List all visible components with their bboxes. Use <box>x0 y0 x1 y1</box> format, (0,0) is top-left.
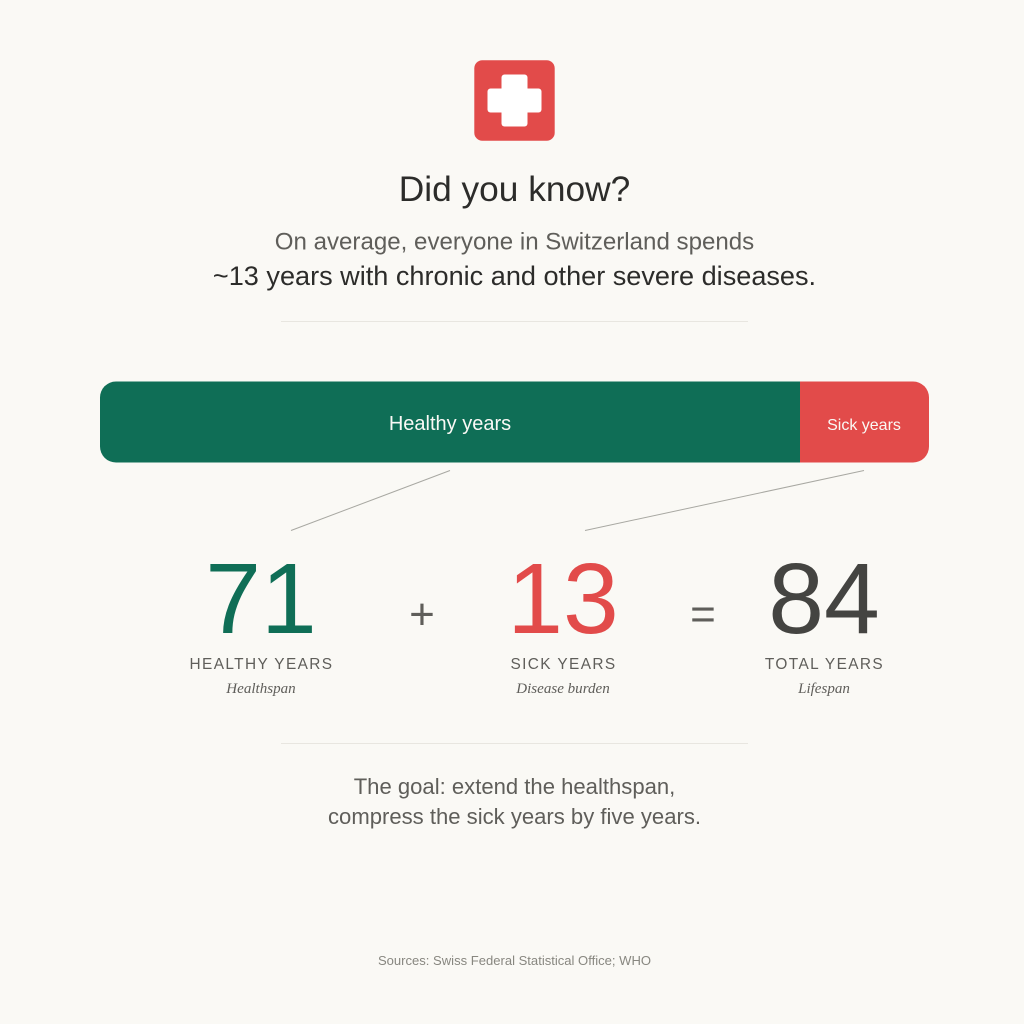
bar segment: sick years <box>800 382 929 462</box>
title: Did you know? <box>399 170 630 209</box>
stat: total years: 84 <box>768 543 880 655</box>
label: sick years: Sick years <box>827 417 901 434</box>
stat: total years: Lifespan <box>797 681 850 697</box>
sources: Sources: Swiss Federal Statistical Office; WHO <box>378 953 651 968</box>
stat: healthy years <box>190 543 333 697</box>
intro text: On average, everyone in Switzerland spends <box>275 228 754 256</box>
operator: equals: = <box>690 590 716 639</box>
stat: healthy years: 71 <box>205 543 317 655</box>
stat: sick years: SICK YEARS <box>510 656 617 673</box>
stat: healthy years: HEALTHY YEARS <box>190 656 333 673</box>
intro text <box>213 228 816 291</box>
stat: healthy years: Healthspan <box>225 681 296 697</box>
stat: total years: TOTAL YEARS <box>765 656 884 673</box>
icon: medical cross <box>474 60 555 141</box>
stat: sick years: Disease burden <box>515 681 610 697</box>
intro text: ~13 years with chronic and other severe diseases. <box>213 260 816 291</box>
goal statement: The goal: extend the healthspan, <box>354 774 675 799</box>
stat: total years <box>765 543 884 697</box>
connector: healthy years <box>291 470 450 530</box>
connector: sick years <box>585 470 864 530</box>
goal statement: compress the sick years by five years. <box>328 804 701 829</box>
label: healthy years: Healthy years <box>389 413 511 435</box>
stacked bar: lifespan <box>100 382 929 462</box>
operator: plus: + <box>409 590 435 639</box>
goal statement <box>328 774 701 829</box>
bar segment: healthy years <box>100 382 800 462</box>
stat: sick years: 13 <box>507 543 619 655</box>
